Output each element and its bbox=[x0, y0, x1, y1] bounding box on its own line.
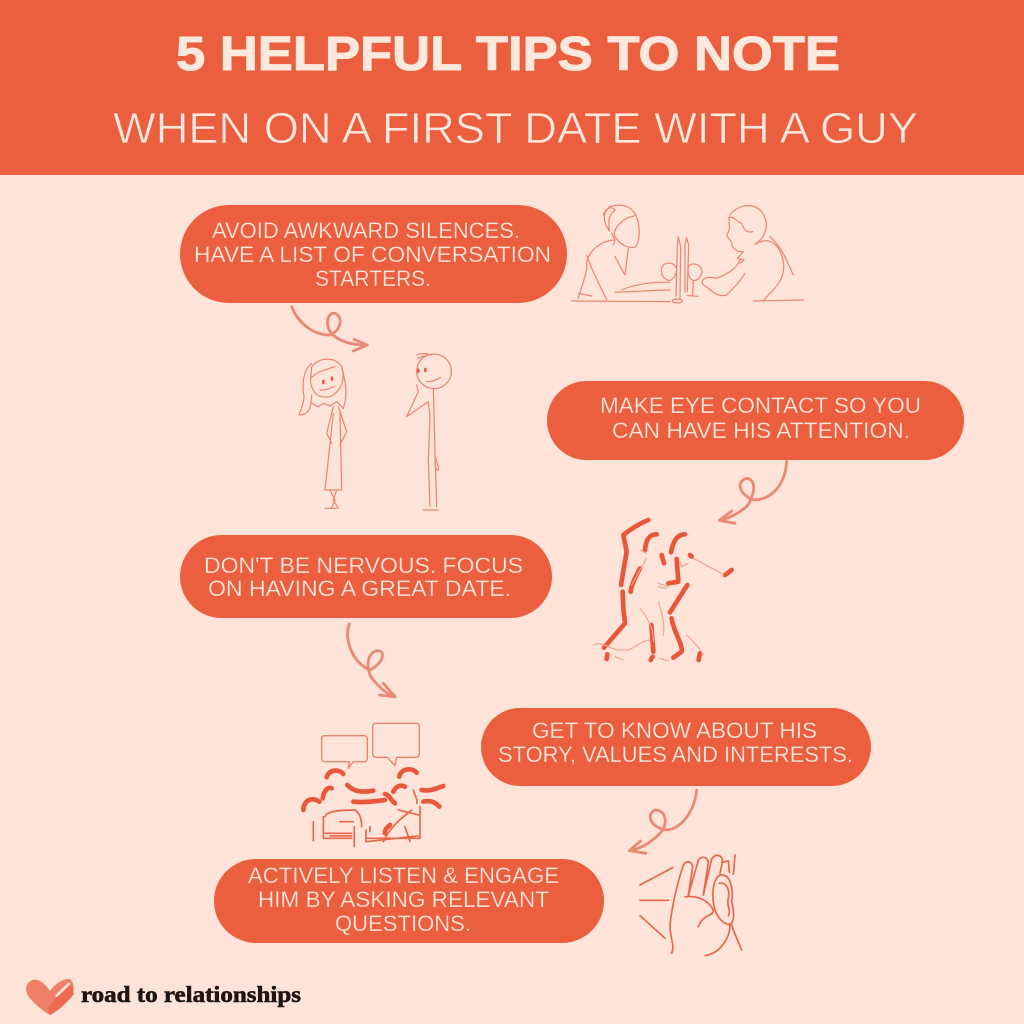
tip 4 pill: STORY, VALUES AND INTERESTS. bbox=[498, 742, 853, 767]
tip 5 pill: ACTIVELY LISTEN & ENGAGE bbox=[248, 863, 559, 888]
tip 4 pill: GET TO KNOW ABOUT HIS bbox=[532, 718, 817, 743]
tip 1 pill bbox=[180, 205, 567, 303]
tip 1 pill: AVOID AWKWARD SILENCES. bbox=[212, 218, 520, 243]
tip 3 pill: ON HAVING A GREAT DATE. bbox=[208, 576, 511, 601]
tip 2 pill: CAN HAVE HIS ATTENTION. bbox=[612, 418, 910, 443]
icon: hand cupped to ear bbox=[640, 855, 742, 956]
logo bbox=[26, 979, 301, 1015]
header banner bbox=[0, 0, 1024, 175]
arrow: tip 3 to conversation bbox=[348, 624, 395, 697]
icon: logo heart bbox=[26, 979, 74, 1015]
arrow: tip 4 to listening hand bbox=[629, 790, 697, 853]
icon: couple at candlelit dinner bbox=[572, 205, 803, 303]
brand name: road to relationships bbox=[81, 982, 301, 1007]
icon: dancing couple bbox=[593, 520, 732, 661]
tip 3 pill bbox=[180, 535, 552, 618]
tip 5 pill: QUESTIONS. bbox=[335, 911, 471, 936]
title: 5 HELPFUL TIPS TO NOTE bbox=[176, 28, 840, 81]
tip 2 pill: MAKE EYE CONTACT SO YOU bbox=[600, 393, 921, 418]
tip 1 pill: STARTERS. bbox=[315, 266, 431, 291]
tip 4 pill bbox=[481, 708, 871, 786]
tip 2 pill bbox=[547, 381, 964, 460]
arrow: tip 2 to dancers bbox=[719, 462, 787, 523]
arrow: tip 1 to stick figures bbox=[292, 307, 367, 351]
icon: stick figures woman and man bbox=[299, 353, 451, 510]
tip 3 pill: DON'T BE NERVOUS. FOCUS bbox=[204, 553, 523, 578]
tip 5 pill: HIM BY ASKING RELEVANT bbox=[258, 887, 549, 912]
subtitle: WHEN ON A FIRST DATE WITH A GUY bbox=[113, 104, 918, 153]
tip 1 pill: HAVE A LIST OF CONVERSATION bbox=[194, 242, 551, 267]
icon: two people talking on a sofa bbox=[303, 723, 443, 847]
tip 5 pill bbox=[214, 859, 604, 943]
